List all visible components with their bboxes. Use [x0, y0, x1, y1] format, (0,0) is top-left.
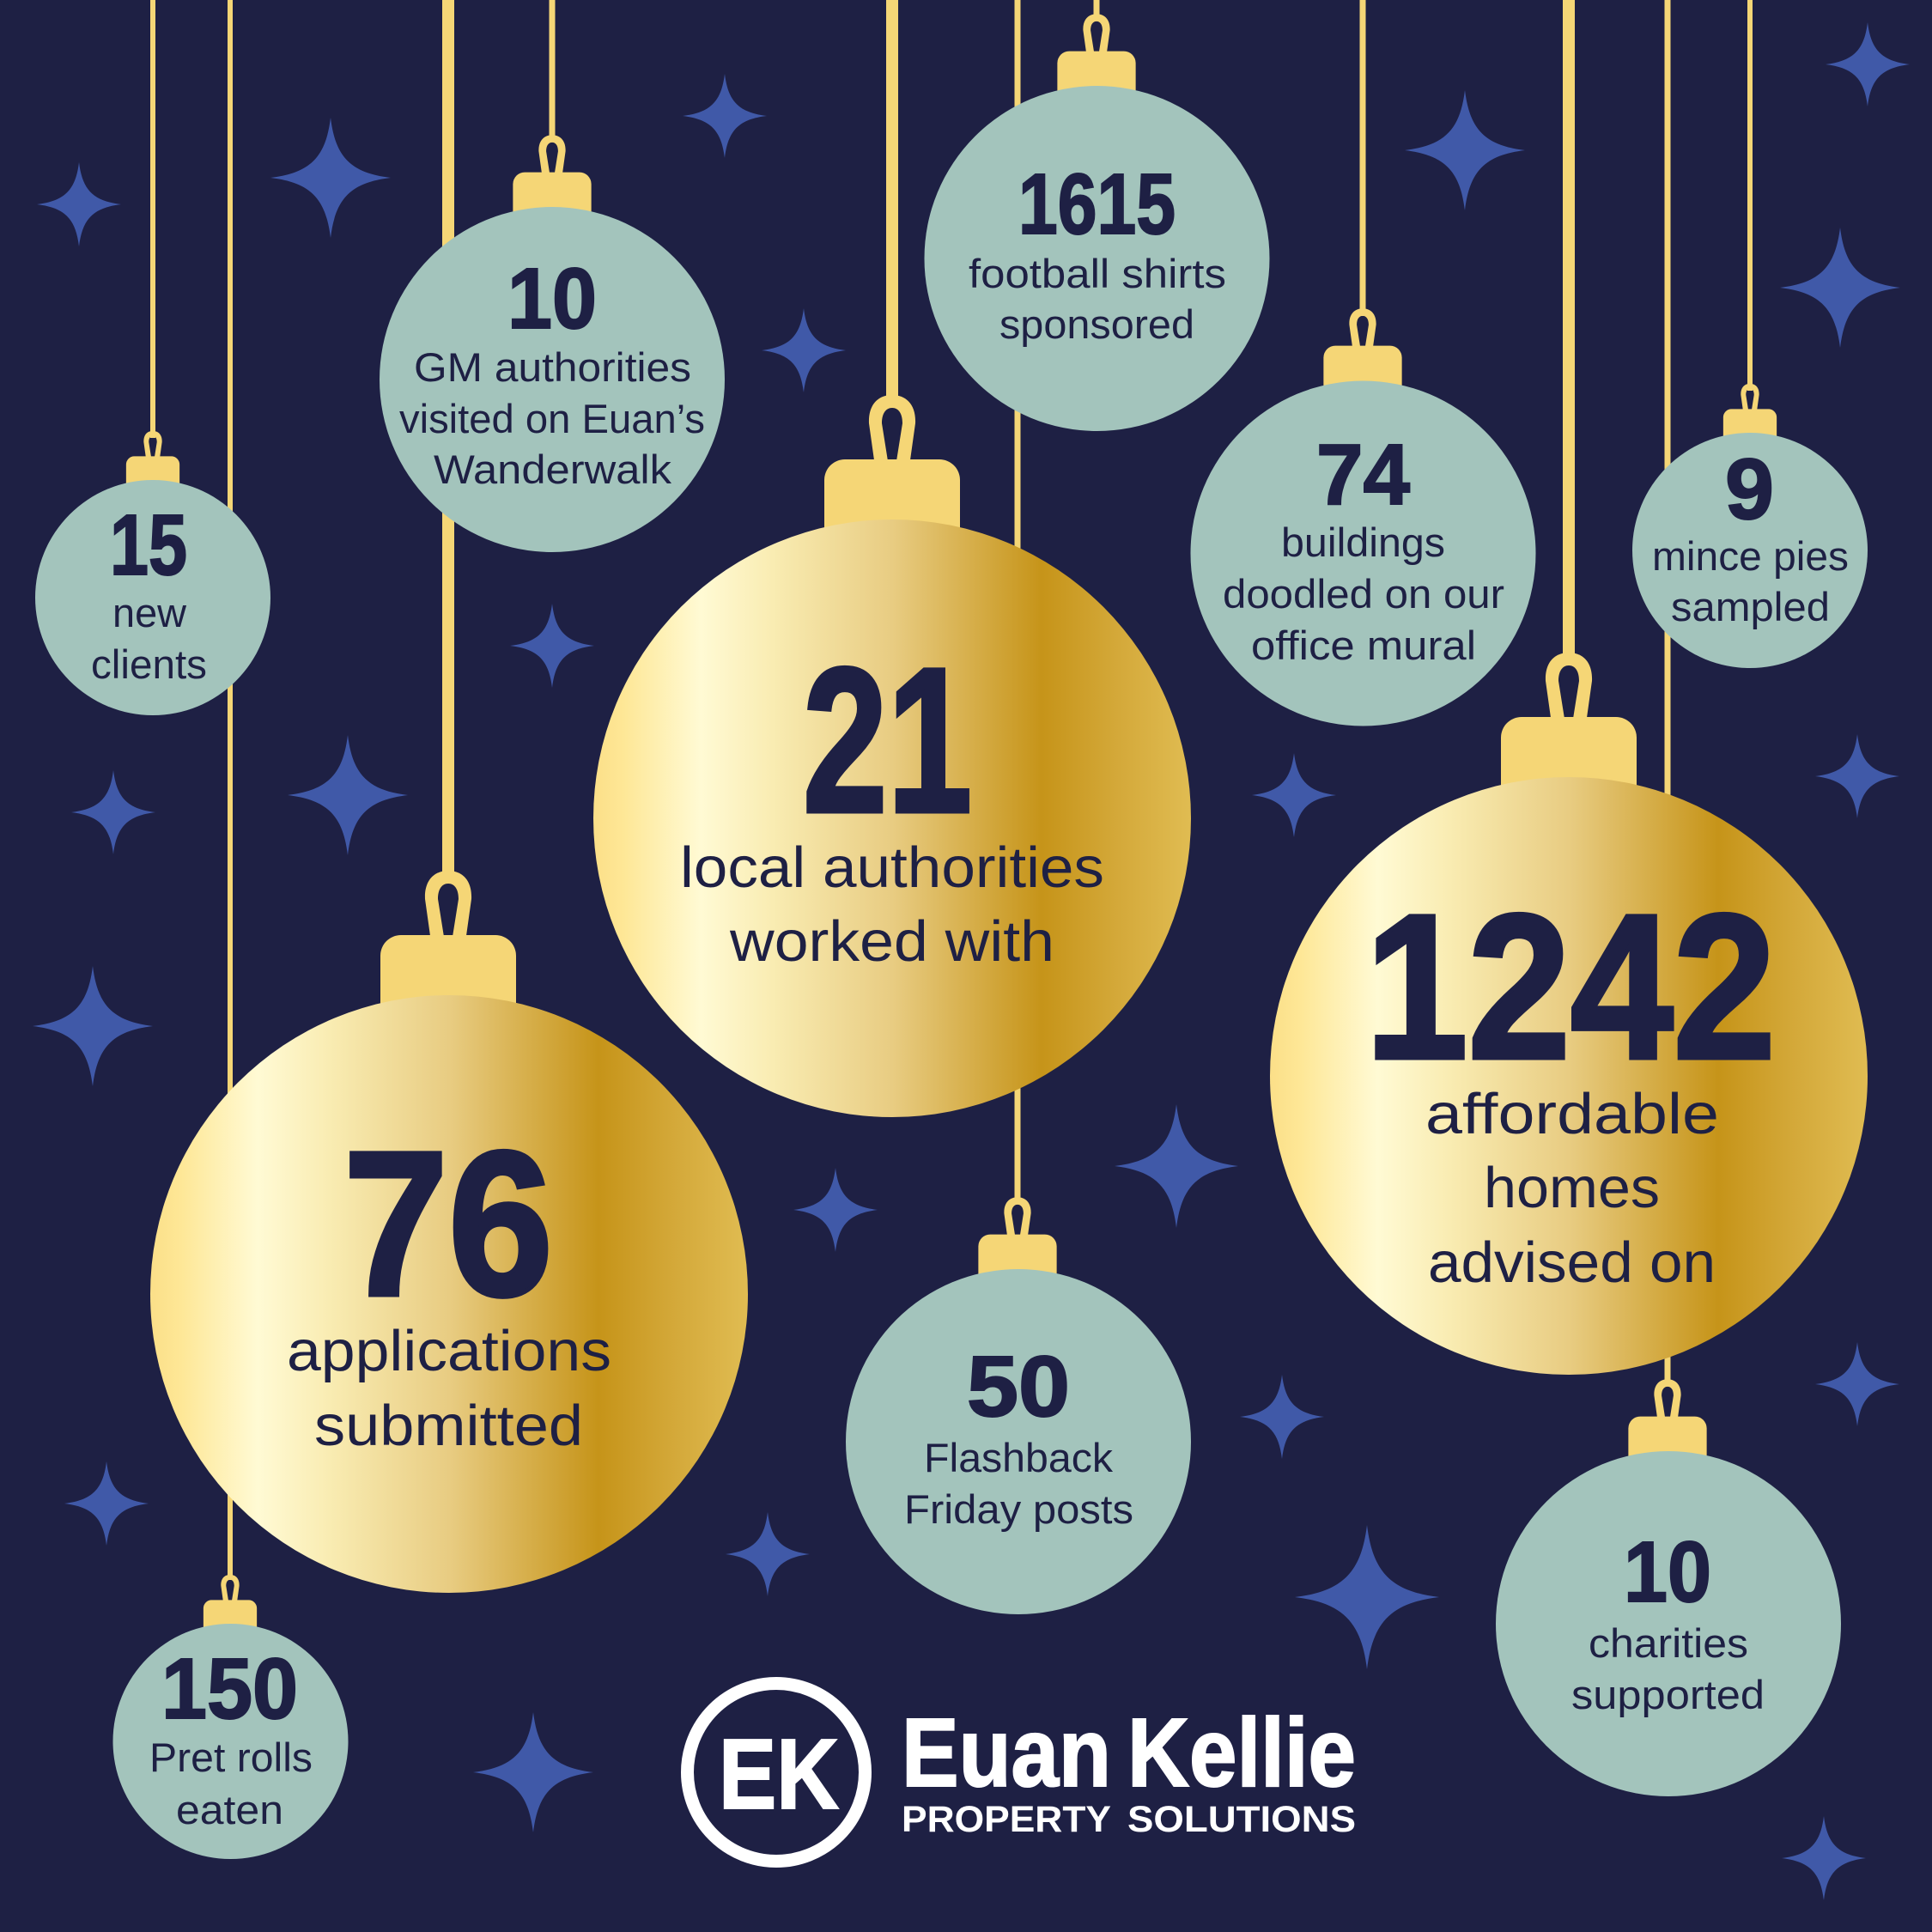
- bauble: 50 Flashback Friday posts: [846, 0, 1191, 1614]
- bauble: 74 buildings doodled on our office mural: 74: [1316, 427, 1410, 523]
- bauble: 15 new clients: new: [112, 590, 187, 635]
- bauble: 1242 affordable homes advised on: [1270, 0, 1868, 1375]
- bauble: 10 charities supported: 10: [1624, 1524, 1711, 1620]
- bauble: 1242 affordable homes advised on: affordable: [1425, 1082, 1719, 1146]
- bauble: 21 local authorities worked with: [593, 0, 1191, 1117]
- bauble: 1242 affordable homes advised on: homes: [1484, 1156, 1660, 1220]
- wordmark: PROPERTY: [902, 1799, 1111, 1840]
- bauble: 150 Pret rolls eaten: 150: [161, 1641, 298, 1737]
- bauble: 15 new clients: [35, 0, 270, 715]
- bauble: 1242 affordable homes advised on: 1242: [1365, 872, 1776, 1102]
- bauble: 10 GM authorities visited on Euan's Wanderwalk: GM authorities: [414, 344, 691, 390]
- logo: Euan Kellie Property Solutions: [687, 1683, 1356, 1862]
- bauble: 76 applications submitted: submitted: [314, 1394, 583, 1458]
- bauble: 10 GM authorities visited on Euan's Wanderwalk: [380, 0, 725, 552]
- bauble: 74 buildings doodled on our office mural: office mural: [1251, 623, 1476, 668]
- bauble: 76 applications submitted: applications: [287, 1319, 611, 1383]
- logo roundel with EK monogram: EK: [719, 1718, 839, 1830]
- bauble: 76 applications submitted: 76: [343, 1109, 553, 1339]
- bauble: 10 charities supported: supported: [1571, 1672, 1765, 1717]
- bauble: 9 mince pies sampled: 9: [1725, 441, 1774, 538]
- bauble: 10 GM authorities visited on Euan's Wanderwalk: 10: [507, 251, 597, 347]
- wordmark: Euan: [902, 1698, 1111, 1807]
- bauble: 10 GM authorities visited on Euan's Wanderwalk: visited on Euan’s: [399, 396, 705, 441]
- bauble: 50 Flashback Friday posts: 50: [967, 1339, 1070, 1435]
- bauble: 21 local authorities worked with: 21: [803, 625, 972, 855]
- bauble: 15 new clients: clients: [91, 641, 207, 687]
- bauble: 50 Flashback Friday posts: Friday posts: [904, 1486, 1133, 1532]
- bauble: 21 local authorities worked with: worked with: [729, 909, 1054, 974]
- wordmark: Kellie: [1127, 1698, 1356, 1807]
- bauble: 150 Pret rolls eaten: eaten: [176, 1787, 283, 1832]
- bauble: 10 charities supported: charities: [1589, 1620, 1748, 1666]
- bauble: 1242 affordable homes advised on: advised on: [1428, 1230, 1716, 1295]
- bauble: 1615 football shirts sponsored: football shirts: [969, 251, 1226, 296]
- bauble: 15 new clients: 15: [110, 497, 187, 593]
- bauble: 74 buildings doodled on our office mural: [1190, 0, 1535, 726]
- bauble: 74 buildings doodled on our office mural: buildings: [1281, 519, 1445, 565]
- wordmark: [902, 1698, 1356, 1840]
- bauble: 50 Flashback Friday posts: Flashback: [924, 1435, 1114, 1480]
- bauble: 150 Pret rolls eaten: [113, 0, 349, 1859]
- bauble: 9 mince pies sampled: mince pies: [1652, 533, 1849, 579]
- bauble: 1615 football shirts sponsored: sponsored: [999, 301, 1194, 347]
- bauble: 150 Pret rolls eaten: Pret rolls: [149, 1735, 313, 1780]
- bauble: 9 mince pies sampled: sampled: [1671, 584, 1830, 629]
- logo roundel with EK monogram: [687, 1683, 866, 1862]
- bauble: 1615 football shirts sponsored: [924, 0, 1269, 431]
- bauble: 1615 football shirts sponsored: 1615: [1018, 156, 1176, 252]
- bauble: 9 mince pies sampled: [1632, 0, 1868, 668]
- bauble: 21 local authorities worked with: local authorities: [680, 835, 1104, 900]
- bauble: 10 GM authorities visited on Euan's Wanderwalk: Wanderwalk: [434, 447, 672, 492]
- bauble: 10 charities supported: [1496, 0, 1841, 1796]
- bauble: 76 applications submitted: [150, 0, 748, 1593]
- bauble: 74 buildings doodled on our office mural: doodled on our: [1223, 571, 1504, 617]
- wordmark: SOLUTIONS: [1127, 1799, 1356, 1840]
